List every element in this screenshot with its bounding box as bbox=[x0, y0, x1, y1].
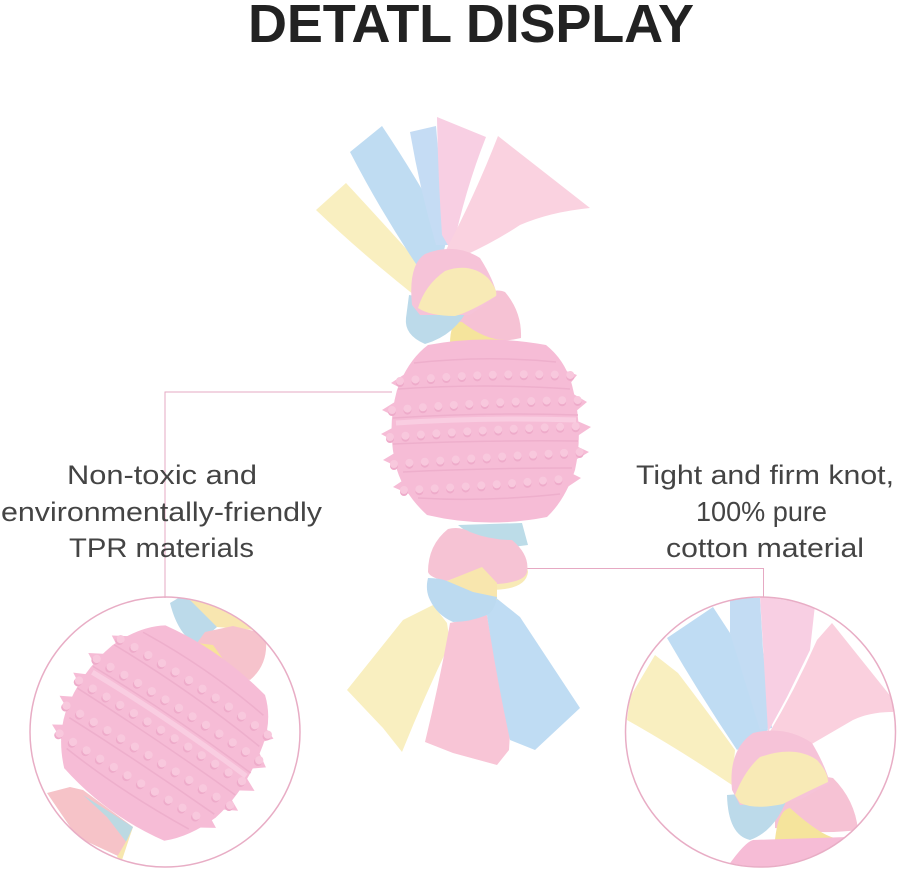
detail circle: cotton knot bbox=[626, 596, 896, 870]
detail circle: rubber ball bbox=[21, 593, 306, 870]
top fabric strips bbox=[316, 117, 590, 295]
text: right feature: Tight and firm knot, bbox=[636, 460, 894, 490]
text: left feature bbox=[1, 460, 323, 563]
callout line: right bbox=[526, 568, 764, 606]
callout line: left bbox=[165, 392, 392, 598]
top knot bbox=[406, 249, 521, 344]
bottom fabric strips bbox=[347, 597, 580, 765]
text: left feature: environmentally-friendly bbox=[1, 497, 323, 527]
text: left feature: Non-toxic and bbox=[67, 460, 257, 490]
rubber ball bbox=[381, 340, 591, 523]
bottom knot bbox=[427, 523, 528, 622]
text: right feature: cotton material bbox=[666, 533, 864, 563]
text: right feature bbox=[636, 460, 894, 563]
text: right feature: 100% pure bbox=[696, 496, 827, 527]
text: left feature: TPR materials bbox=[69, 533, 254, 563]
main toy bbox=[316, 117, 591, 765]
